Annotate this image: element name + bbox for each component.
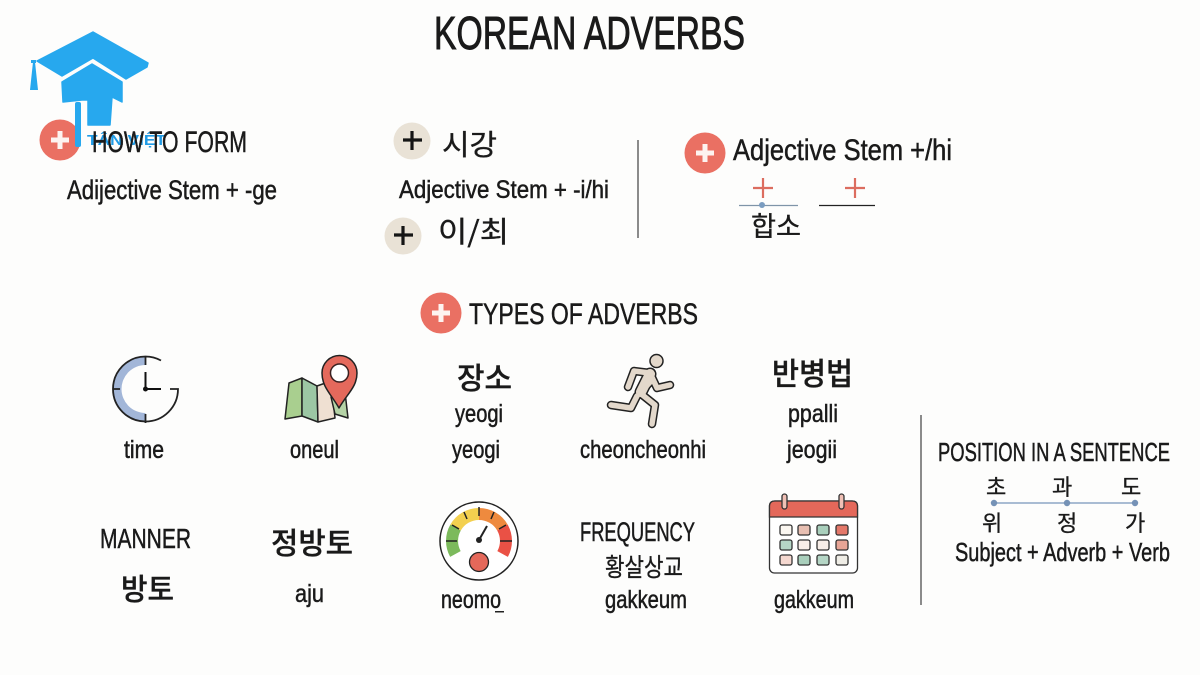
item: cheoncheonhi (580, 354, 706, 464)
label: neomo (441, 586, 501, 614)
korean row: bottom syllables: 가 (1125, 506, 1145, 538)
logo wordmark: TÂN VIỆT (87, 131, 166, 149)
title: KOREAN ADVERBS (434, 7, 745, 59)
korean label: 정방토: 정방토 (271, 519, 353, 563)
korean row: top syllables: 도 (1121, 470, 1141, 502)
item: time (113, 356, 178, 464)
korean label: 황살상교: 황살상교 (605, 548, 683, 584)
diagram: first blank with plus (739, 178, 801, 244)
icon: speedometer gauge (440, 502, 518, 580)
icon: red plus (684, 132, 726, 174)
timeline (991, 500, 1138, 506)
icon: beige plus two (384, 218, 422, 254)
korean label: 합소: 합소 (751, 205, 801, 244)
item: frequency (580, 517, 695, 614)
diagram: second blank with plus (819, 178, 875, 206)
heading: adjective stem hi: Adjective Stem +/hi (733, 134, 952, 167)
item: aju (271, 519, 353, 608)
item: place (452, 354, 512, 464)
section: time and i/hi form (384, 122, 609, 254)
icon: running figure (611, 354, 670, 424)
formula: adjective stem plus i/hi: Adjective Stem + -i/hi (399, 176, 609, 204)
label: yeogi one: yeogi (455, 400, 503, 428)
icon: beige plus one (394, 122, 430, 160)
panel: position in a sentence (938, 437, 1170, 567)
heading: manner: MANNER (100, 523, 191, 554)
section: adjective stem hi (684, 132, 952, 244)
item: neomo (440, 502, 518, 614)
label: oneul (290, 436, 339, 464)
item: gakkeum calendar (770, 494, 858, 614)
korean label: 시강: 시강 (442, 122, 497, 164)
icon: calendar (770, 494, 858, 573)
logo: graduation cap arrow (30, 32, 166, 149)
label: ppalli: ppalli (788, 400, 838, 428)
korean row: bottom syllables (982, 506, 1145, 538)
heading text: TYPES OF ADVERBS (469, 298, 698, 331)
formula: adjective stem plus ge: Adijective Stem + -ge (67, 175, 277, 205)
label: jeogii: jeogii (786, 436, 837, 464)
label: gakkeum (774, 586, 854, 614)
korean label: 반병법: 반병법 (772, 349, 853, 394)
item: manner (100, 523, 191, 609)
label: aju: aju (295, 580, 324, 608)
heading: types of adverbs (420, 292, 698, 334)
icon: clock (113, 356, 178, 423)
korean label: 장소: 장소 (457, 354, 512, 398)
item: oneul (285, 356, 357, 464)
korean label: 방토: 방토 (121, 565, 174, 609)
heading: frequency: FREQUENCY (580, 517, 695, 547)
korean row: top syllables: 초 (986, 470, 1006, 502)
korean row: bottom syllables: 정 (1057, 506, 1077, 538)
label: cheoncheonhi (580, 436, 706, 464)
label: time (124, 436, 164, 464)
section: how to form (67, 126, 277, 205)
korean row: top syllables (986, 470, 1141, 502)
label: gakkeum: gakkeum (605, 586, 687, 614)
korean row: bottom syllables: 위 (982, 506, 1002, 538)
icon: map with pin (285, 356, 357, 422)
icon: red plus how to form (40, 120, 80, 160)
item: manner korean (772, 349, 853, 464)
label: yeogi two: yeogi (452, 436, 500, 464)
korean row: top syllables: 과 (1052, 470, 1072, 502)
heading: how to form: HOW TO FORM (92, 126, 247, 159)
korean label: 이/최: 이/최 (438, 209, 509, 251)
icon: red plus (420, 292, 462, 334)
